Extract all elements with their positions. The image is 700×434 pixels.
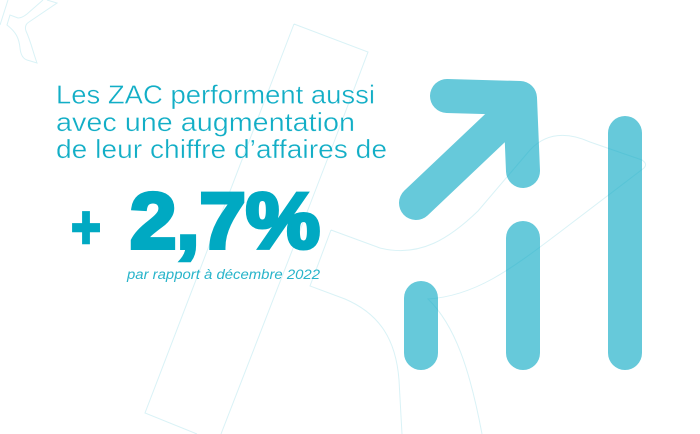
bar: short — [404, 281, 438, 370]
plus sign: + — [71, 194, 101, 261]
heading line 1: Les ZAC performent aussi — [56, 80, 375, 110]
value: 2,7% — [130, 176, 320, 265]
heading line 3: de leur chiffre d’affaires de — [56, 134, 387, 164]
decorative logo outline: large — [145, 24, 646, 434]
caption: par rapport à décembre 2022 — [126, 267, 321, 282]
decorative logo outline: top-left corner — [0, 0, 57, 63]
bar: medium — [506, 221, 540, 370]
icon: upward arrow — [416, 96, 523, 203]
chart: rising bars — [404, 116, 642, 370]
heading text — [56, 80, 387, 164]
heading line 2: avec une augmentation — [56, 107, 355, 137]
big figure: plus 2,7% — [71, 176, 320, 265]
bar: tall — [608, 116, 642, 370]
